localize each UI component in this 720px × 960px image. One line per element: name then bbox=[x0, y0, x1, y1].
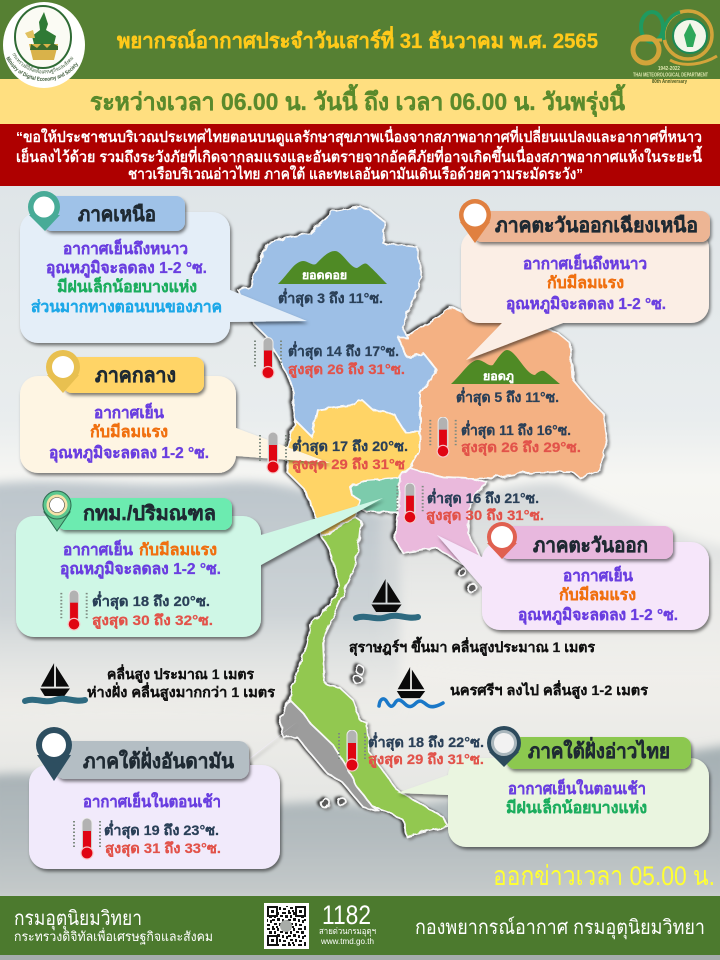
footer: 1182 bbox=[322, 900, 371, 930]
logo: ministry emblem: Ministry of Digital Economy and Society bbox=[6, 56, 78, 81]
panel: south Gulf bbox=[397, 726, 709, 847]
panel: south Andaman bbox=[29, 722, 297, 869]
temps: north: ต่ำสุด 14 ถึง 17°ซ. bbox=[288, 341, 399, 360]
panel: east: กับมีลมแรง bbox=[559, 585, 636, 604]
panel: central: อุณหภูมิจะลดลง 1-2 °ซ. bbox=[49, 444, 209, 464]
panel: south Andaman: ภาคใต้ฝั่งอันดามัน bbox=[83, 746, 234, 773]
subtitle: time range: ระหว่างเวลา 06.00 น. วันนี้ ถึง เวลา 06.00 น. วันพรุ่งนี้ bbox=[90, 83, 626, 118]
panel: east: อากาศเย็น bbox=[563, 564, 633, 585]
panel: Bangkok and vicinity: กทม./ปริมณฑล bbox=[83, 503, 216, 525]
header band bbox=[0, 0, 720, 79]
panel: north: อากาศเย็นถึงหนาว bbox=[63, 237, 188, 258]
sea: upper Gulf bbox=[349, 579, 595, 656]
temps: central: ต่ำสุด 17 ถึง 20°ซ. bbox=[292, 436, 408, 455]
panel: south Andaman: อากาศเย็นในตอนเช้า bbox=[83, 790, 221, 811]
panel: Bangkok and vicinity: อุณหภูมิจะลดลง 1-2 °ซ. bbox=[60, 560, 221, 580]
panel: north: มีฝนเล็กน้อยบางแห่ง bbox=[57, 275, 197, 296]
temps: northeast: สูงสุด 26 ถึง 29°ซ. bbox=[461, 439, 581, 456]
mountain label: northeast bbox=[451, 350, 560, 384]
footer: สายด่วนกรมอุตุฯ bbox=[319, 926, 376, 937]
region: south Andaman coast bbox=[280, 700, 380, 812]
temps: central bbox=[260, 432, 408, 473]
region: Bangkok and vicinity bbox=[350, 477, 400, 513]
footer: กระทรวงดิจิทัลเพื่อเศรษฐกิจและสังคม bbox=[14, 928, 213, 945]
panel: northeast: กับมีลมแรง bbox=[547, 273, 624, 292]
islands bbox=[320, 568, 476, 808]
temps: south gulf bbox=[339, 730, 484, 771]
panel: northeast bbox=[459, 199, 710, 360]
panel: Bangkok and vicinity: ต่ำสุด 18 ถึง 20°ซ. bbox=[92, 591, 210, 610]
panel: south Gulf: ภาคใต้ฝั่งอ่าวไทย bbox=[528, 736, 670, 763]
temps: north bbox=[255, 338, 405, 378]
warning band: ชาวเรือบริเวณอ่าวไทย ภาคใต้ และทะเลอันดามันเดินเรือด้วยความระมัดระวัง” bbox=[128, 164, 583, 183]
sea: lower Gulf: นครศรีฯ ลงไป คลื่นสูง 1-2 เมตร bbox=[450, 680, 648, 699]
logo: ministry emblem: กระทรวงดิจิทัลเพื่อเศรษฐกิจและสังคม bbox=[12, 53, 74, 74]
footer bbox=[0, 896, 720, 960]
panel: east: อุณหภูมิจะลดลง 1-2 °ซ. bbox=[518, 606, 678, 626]
panel: central bbox=[20, 350, 330, 473]
temps: north: สูงสุด 26 ถึง 31°ซ. bbox=[288, 361, 405, 378]
panel: central: ภาคกลาง bbox=[95, 365, 176, 387]
mountain temp: north: ต่ำสุด 3 ถึง 11°ซ. bbox=[278, 288, 383, 307]
warning band: เย็นลงไว้ด้วย รวมถึงระวังภัยที่เกิดจากลมแรงและอันตรายจากอัคคีภัยที่อาจเกิดขึ้นเนื่องสภาพอากาศแห้งในระยะนี้ bbox=[16, 145, 703, 166]
panel: east: ภาคตะวันออก bbox=[533, 535, 648, 557]
mountain label: north bbox=[278, 251, 387, 284]
panel: south Gulf: อากาศเย็นในตอนเช้า bbox=[508, 777, 646, 798]
date band bbox=[0, 79, 720, 124]
temps: south gulf: ต่ำสุด 18 ถึง 22°ซ. bbox=[368, 732, 484, 751]
region: central bbox=[287, 400, 420, 537]
temps: central: สูงสุด 29 ถึง 31°ซ bbox=[292, 456, 406, 473]
sea: Andaman bbox=[25, 663, 275, 701]
sea: Andaman: ห่างฝั่ง คลื่นสูงมากกว่า 1 เมตร bbox=[87, 682, 275, 701]
mountain label: northeast: ยอดภู bbox=[483, 371, 514, 384]
panel: northeast: อากาศเย็นถึงหนาว bbox=[523, 252, 647, 273]
temps: east: ต่ำสุด 16 ถึง 21°ซ. bbox=[427, 488, 539, 507]
region: northeast bbox=[398, 307, 607, 478]
QR code bbox=[264, 903, 309, 949]
sea: Andaman: คลื่นสูง ประมาณ 1 เมตร bbox=[107, 664, 254, 683]
panel: east bbox=[437, 522, 709, 630]
panel: northeast: อุณหภูมิจะลดลง 1-2 °ซ. bbox=[506, 295, 666, 315]
region: south bbox=[290, 517, 448, 837]
panel: south Andaman: ต่ำสุด 19 ถึง 23°ซ. bbox=[104, 820, 219, 839]
logo: 80th anniversary: 80th Anniversary bbox=[652, 79, 687, 85]
region: east bbox=[395, 468, 487, 567]
panel: Bangkok and vicinity: กับมีลมแรง bbox=[139, 540, 217, 559]
mountain label: north: ยอดดอย bbox=[302, 270, 347, 282]
panel: north: ส่วนมากทางตอนบนของภาค bbox=[31, 299, 222, 316]
temps: east: สูงสุด 30 ถึง 31°ซ. bbox=[426, 507, 544, 524]
logo: 80th anniversary bbox=[633, 11, 717, 85]
footer: www.tmd.go.th bbox=[320, 937, 374, 946]
panel: south Gulf: มีฝนเล็กน้อยบางแห่ง bbox=[506, 796, 647, 817]
mountain temp: northeast: ต่ำสุด 5 ถึง 11°ซ. bbox=[456, 387, 559, 406]
background: misty mountains bbox=[0, 186, 720, 900]
panel: north: อุณหภูมิจะลดลง 1-2 °ซ. bbox=[46, 259, 207, 279]
map of Thailand bbox=[238, 207, 607, 837]
sea: lower Gulf bbox=[379, 667, 648, 707]
region: north bbox=[238, 207, 437, 437]
panel: south Andaman: สูงสุด 31 ถึง 33°ซ. bbox=[105, 840, 221, 857]
panel: north bbox=[20, 191, 307, 343]
temps: northeast: ต่ำสุด 11 ถึง 16°ซ. bbox=[461, 420, 571, 439]
footer: กรมอุตุนิยมวิทยา bbox=[14, 908, 142, 931]
title: พยากรณ์อากาศประจำวันเสาร์ที่ 31 ธันวาคม พ.ศ. 2565 bbox=[117, 25, 598, 53]
panel: central: กับมีลมแรง bbox=[90, 422, 168, 441]
panel: Bangkok and vicinity: สูงสุด 30 ถึง 32°ซ. bbox=[92, 612, 213, 629]
panel: north: ภาคเหนือ bbox=[78, 203, 156, 226]
logo: ministry emblem bbox=[3, 2, 85, 88]
temps: east bbox=[397, 483, 544, 524]
sea: upper Gulf: สุราษฎร์ฯ ขึ้นมา คลื่นสูงประมาณ 1 เมตร bbox=[349, 636, 595, 656]
temps: south gulf: สูงสุด 29 ถึง 31°ซ. bbox=[368, 751, 484, 768]
panel: Bangkok and vicinity: อากาศเย็น bbox=[63, 538, 133, 559]
warning band bbox=[0, 124, 720, 186]
temps: northeast bbox=[430, 417, 581, 457]
panel: northeast: ภาคตะวันออกเฉียงเหนือ bbox=[495, 214, 698, 237]
logo: 80th anniversary: 1942-2022 bbox=[658, 66, 680, 72]
panel: Bangkok and vicinity bbox=[16, 491, 383, 637]
panel: central: อากาศเย็น bbox=[94, 401, 164, 422]
